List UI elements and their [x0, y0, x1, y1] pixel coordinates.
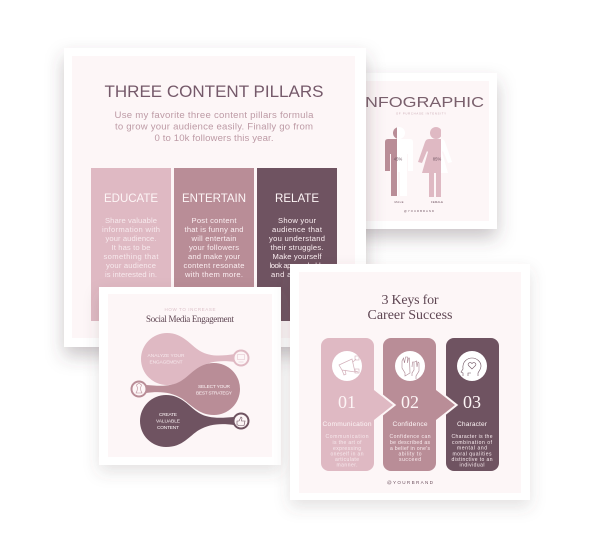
column: educate: EDUCATE [104, 193, 158, 205]
column: communication: expressing [333, 446, 361, 452]
column: communication: articulate [335, 457, 359, 463]
column: character: mental and [457, 446, 487, 452]
column: confidence: 02 [401, 392, 419, 412]
title: Career Success [368, 308, 452, 323]
column: entertain: that is funny and [184, 225, 244, 234]
icon: chat [238, 354, 244, 362]
label: brand handle: @YOURBRAND [404, 209, 434, 213]
column: character: moral qualities [452, 452, 492, 458]
icon: raised hands [395, 351, 425, 381]
column: educate: is interested in. [105, 270, 157, 279]
label: female percent: 85% [433, 156, 441, 162]
column: character: individual [460, 462, 484, 468]
panel: three content pillars [64, 48, 366, 347]
heading: Social Media Engagement [146, 314, 234, 324]
blob: create: CREATE [159, 412, 177, 418]
title: 3 Keys for [382, 293, 439, 308]
column: communication: Communication [326, 434, 369, 440]
blob: analyze: ENGAGEMENT [150, 360, 183, 366]
label: female: FEMALE [431, 200, 443, 204]
column: relate: Show your [278, 216, 316, 225]
column: relate: their struggles. [270, 243, 324, 252]
column: character: distinctive to an [452, 457, 493, 463]
column: confidence: Confidence [392, 421, 428, 428]
column: educate: information with [102, 225, 160, 234]
column: communication [321, 338, 393, 471]
column: communication: oneself in an [330, 452, 364, 458]
intro text [114, 110, 314, 144]
column: character: Character [457, 421, 488, 428]
intro text: to grow your audience easily. Finally go from [115, 122, 313, 132]
column: communication: 01 [338, 392, 356, 412]
panel: infographic card [340, 73, 497, 229]
column: confidence: be described as [390, 440, 430, 446]
column: communication: is the art of [332, 440, 362, 446]
column: relate: audience that [272, 225, 323, 234]
column: relate: look approachable [270, 261, 324, 270]
column: educate [91, 168, 171, 321]
column: entertain: content resonate [184, 261, 244, 270]
column: entertain: Post content [192, 216, 237, 225]
column: entertain: and make your [188, 252, 240, 261]
column: confidence [383, 338, 455, 471]
column: confidence: a belief in one's [390, 446, 430, 452]
column: educate: something that [104, 252, 159, 261]
blob: create [140, 395, 250, 447]
panel: 3 keys for career success [290, 264, 530, 500]
column: relate: Make yourself [272, 252, 322, 261]
column: communication: manner. [336, 462, 358, 468]
column: character [446, 338, 499, 471]
title: THREE CONTENT PILLARS [104, 82, 324, 101]
column: character: 03 [463, 392, 481, 412]
blob: analyze [141, 333, 250, 385]
column: educate: your audience. [106, 234, 156, 243]
blob: select: SELECT YOUR [198, 384, 231, 390]
column: educate: your audience [106, 261, 156, 270]
column: character: Character is the [452, 434, 493, 440]
column: communication: Communication [322, 421, 372, 428]
column: entertain: with them more. [184, 270, 243, 279]
icon: male figure [385, 127, 413, 196]
subheading: purchase intensity: OF PURCHASE INTENSITY [396, 112, 446, 116]
icon: megaphone [332, 351, 362, 381]
icon: thumbs up [237, 417, 245, 426]
column: relate: RELATE [275, 193, 319, 205]
icon: female figure [418, 127, 452, 197]
column: relate: and authentic. [271, 270, 323, 279]
column: entertain: ENTERTAIN [182, 193, 246, 205]
column: relate: you understand [269, 234, 325, 243]
column: educate: Share valuable [105, 216, 157, 225]
blob: analyze: ANALYZE YOUR [148, 353, 185, 359]
column: entertain [174, 168, 254, 321]
column: confidence: succeed [399, 457, 421, 463]
title [368, 293, 452, 323]
column: confidence: Confidence can [390, 434, 431, 440]
label: brand handle: @YOURBRAND [387, 480, 434, 485]
icon: head with heart [457, 351, 487, 381]
column: educate: It has to be [112, 243, 150, 252]
blob: create: VALUABLE [156, 418, 180, 424]
heading: infographic: INFOGRAPHIC [360, 94, 484, 111]
label: male: MALE [394, 200, 404, 204]
column: confidence: ability to [398, 452, 422, 458]
blob: create: CONTENT [157, 425, 179, 431]
column: entertain: will entertain [190, 234, 236, 243]
blob: select: BEST STRATEGY [196, 390, 233, 396]
intro text: 0 to 10k followers this year. [154, 133, 274, 144]
intro text: Use my favorite three content pillars formula [114, 110, 314, 121]
kicker: HOW TO INCREASE [164, 307, 216, 312]
panel: social media engagement [99, 287, 281, 465]
column: relate [257, 168, 337, 321]
label: male percent: 45% [394, 156, 402, 162]
column: character: combination of [452, 440, 493, 446]
blob: select [130, 363, 240, 415]
icon: chess piece [136, 383, 142, 393]
column: entertain: your followers [189, 243, 239, 252]
